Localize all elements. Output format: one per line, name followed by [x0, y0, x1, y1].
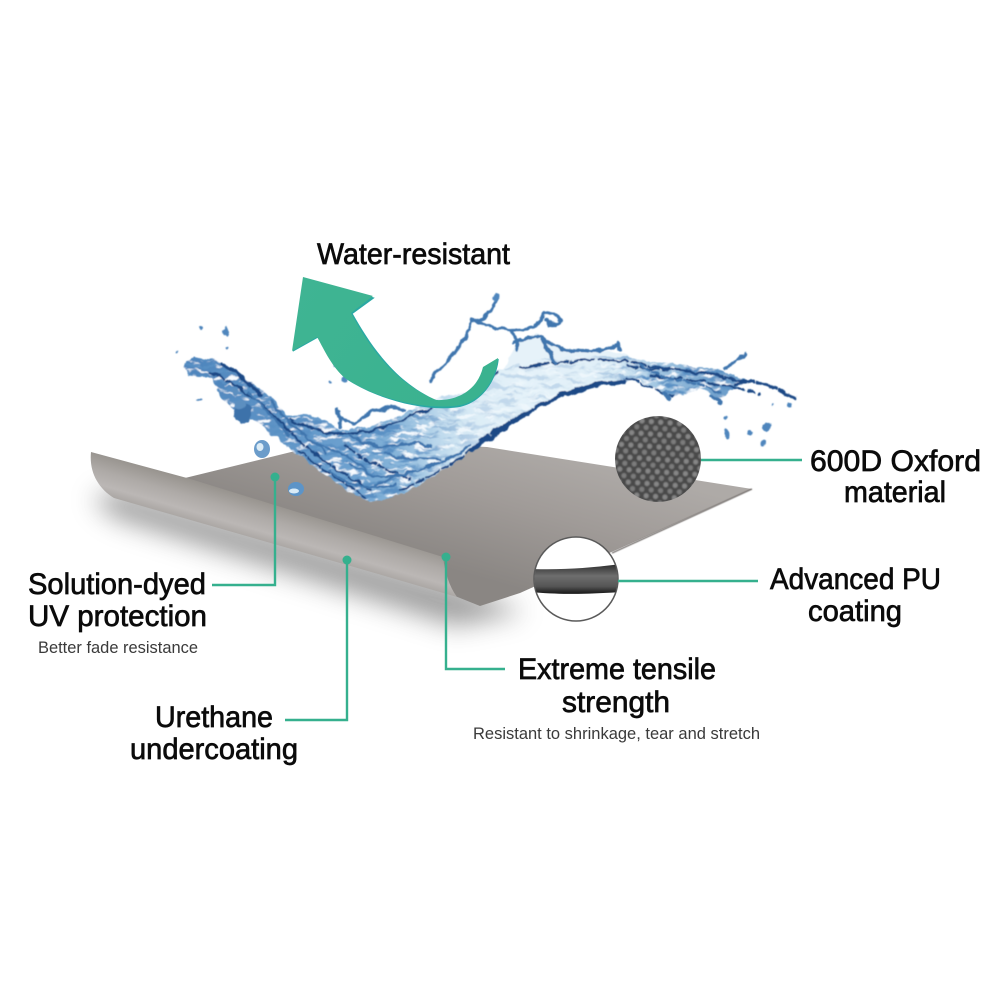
pale wash over right of water body [403, 356, 660, 494]
label: Solution-dyed UV protection [28, 568, 207, 657]
label: Urethane undercoating: undercoating [130, 733, 298, 766]
label: 600D Oxford material [810, 445, 981, 509]
sheet right edge highlight [612, 489, 752, 553]
label: Advanced PU coating [770, 563, 941, 628]
label: Extreme tensile strength [473, 653, 760, 743]
label: Extreme tensile strength: Resistant to shrinkage, tear and stretch [473, 724, 760, 743]
label: Extreme tensile strength: Extreme tensile [518, 653, 716, 686]
label: Extreme tensile strength: strength [562, 686, 670, 719]
shadow under roll [92, 490, 525, 626]
icon: fabric texture circle [614, 415, 702, 503]
upper splash tendrils [337, 298, 796, 428]
title: water-resistant: Water-resistant [317, 238, 511, 271]
label: Solution-dyed UV protection: Better fade resistance [38, 638, 198, 657]
rolled front edge of sheet [91, 452, 457, 597]
label: Urethane undercoating: Urethane [155, 701, 273, 734]
water splash [175, 292, 796, 503]
label: Urethane undercoating [130, 701, 298, 766]
label: Solution-dyed UV protection: UV protection [28, 600, 207, 633]
label: Solution-dyed UV protection: Solution-dyed [28, 568, 206, 601]
material sheet illustration [91, 440, 752, 626]
pale upper splash fill [505, 333, 640, 385]
flat sheet top surface [185, 440, 752, 606]
connector: UV protection [212, 472, 280, 585]
water droplets [175, 292, 791, 445]
droplet on sheet surface [288, 482, 304, 496]
main water body [182, 356, 745, 503]
thick dark lower band on right [472, 380, 625, 450]
icon: PU coating cross-section circle [530, 537, 622, 621]
label: 600D Oxford material: material [844, 476, 946, 509]
connector: urethane undercoating [285, 556, 352, 720]
connector: 600D Oxford [701, 459, 802, 461]
label: Advanced PU coating: Advanced PU [770, 563, 941, 596]
connector: PU coating [618, 580, 758, 582]
mid blue water lines [250, 365, 720, 487]
green arrow [292, 277, 499, 408]
dark crest lines [210, 360, 760, 498]
label: 600D Oxford material: 600D Oxford [810, 445, 981, 478]
connector: extreme tensile strength [442, 552, 505, 669]
label: Advanced PU coating: coating [808, 595, 902, 628]
droplet on sheet left [254, 440, 270, 458]
